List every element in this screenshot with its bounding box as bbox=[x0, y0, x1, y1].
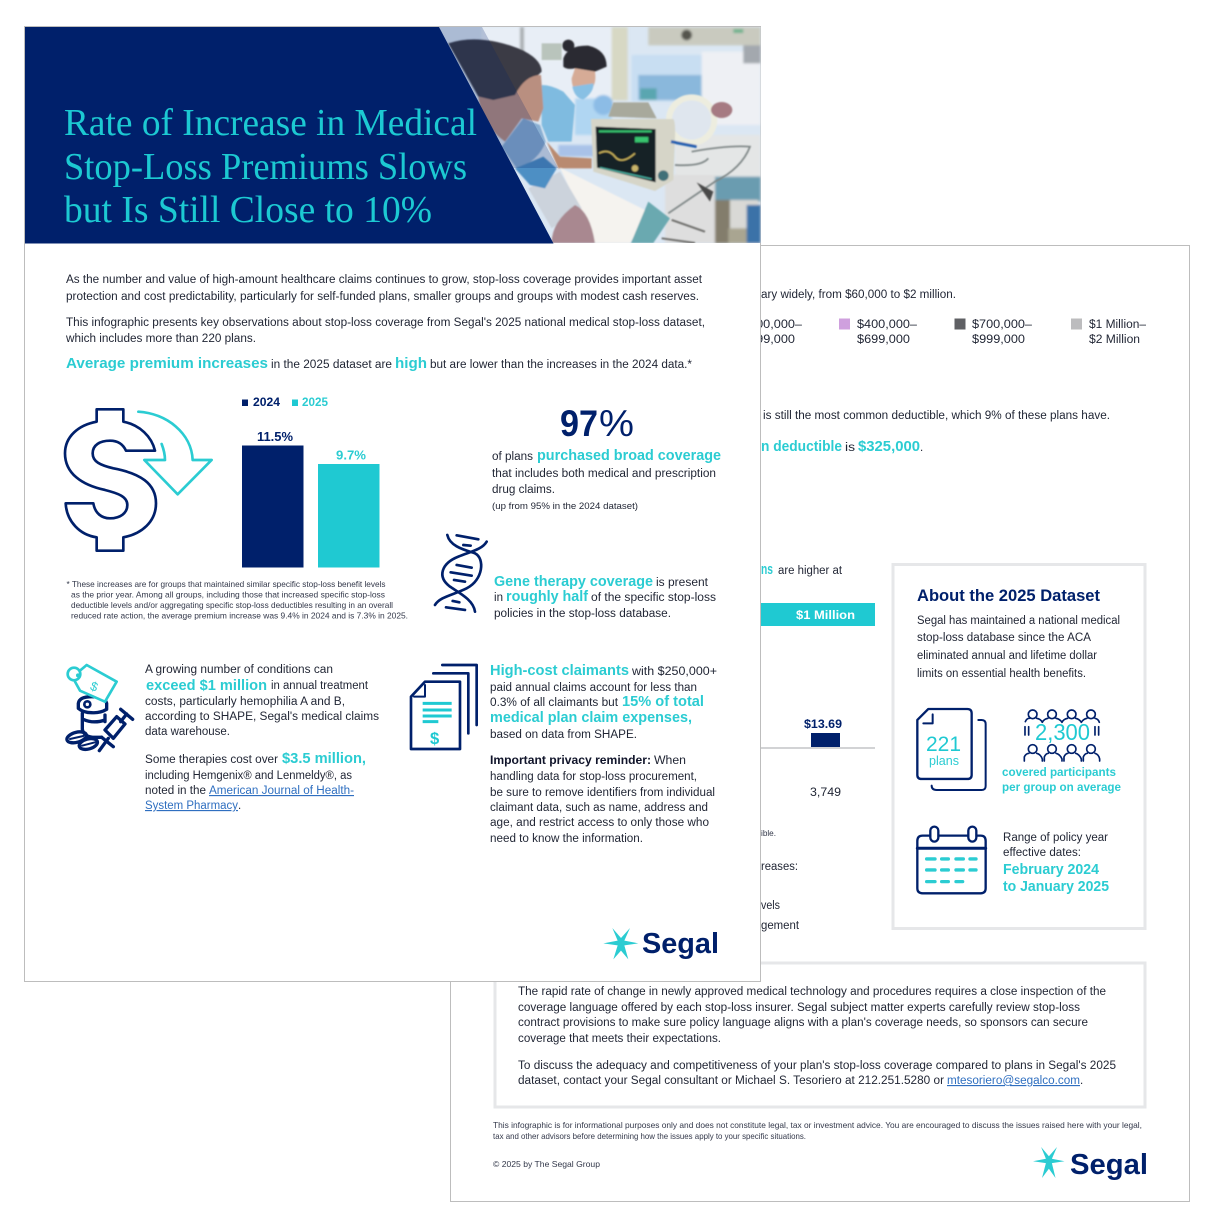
deductible legend: $100,000– bbox=[742, 319, 803, 331]
intro text: protection and cost predictability, particularly for self-funded plans, smaller groups and groups with modest cash reserves. bbox=[66, 291, 699, 303]
most common deductible text: is still the most common deductible, which 9% of these plans have. bbox=[763, 410, 1110, 422]
deductible legend: $399,000 bbox=[742, 334, 795, 346]
gene therapy text: Gene therapy coverage bbox=[494, 574, 653, 590]
gene therapy text bbox=[494, 574, 716, 620]
value: 3,749: 3,749 bbox=[810, 787, 841, 799]
panel: front page bbox=[24, 26, 761, 982]
translucent band bbox=[439, 27, 558, 168]
photo: nurses and patient monitor bbox=[435, 27, 761, 243]
exceed $1 million text: costs, particularly hemophilia A and B, bbox=[145, 696, 345, 708]
icon: participants: 2,300 bbox=[1035, 719, 1090, 745]
bar: $13.69 bbox=[761, 719, 875, 749]
stat: 97% bbox=[560, 403, 634, 444]
callout paragraph 2: mtesoriero@segalco.com bbox=[947, 1075, 1080, 1087]
high-cost claimants text: with $250,000+ bbox=[631, 666, 717, 678]
gene therapy text: policies in the stop-loss database. bbox=[494, 608, 671, 620]
gene therapy text: of the specific stop-loss bbox=[591, 592, 716, 604]
panel: About the 2025 Dataset bbox=[893, 564, 1145, 928]
average premium increases statement: Average premium increases bbox=[66, 356, 268, 372]
deductible range text: ary widely, from $60,000 to $2 million. bbox=[761, 289, 956, 301]
premiums text: are higher at bbox=[778, 565, 843, 577]
deductible legend: $999,000 bbox=[972, 334, 1025, 346]
cut-off text fragments: ible. bbox=[761, 828, 776, 838]
callout paragraph 2 bbox=[518, 1060, 1116, 1087]
effective dates text: February 2024 bbox=[1003, 862, 1099, 878]
bar: 2024 bbox=[242, 430, 304, 568]
high-cost claimants text bbox=[490, 663, 717, 741]
average premium increases statement: in the 2025 dataset are bbox=[271, 359, 392, 371]
$3.5 million text: . bbox=[238, 800, 241, 812]
disclaimer bbox=[493, 1120, 1142, 1141]
icon: 221 plans: plans bbox=[929, 753, 959, 768]
participants caption bbox=[1002, 765, 1121, 794]
description: Segal has maintained a national medical bbox=[917, 615, 1120, 627]
deductible legend: $400,000– bbox=[857, 319, 918, 331]
privacy reminder text: be sure to remove identifiers from individual bbox=[490, 787, 715, 799]
effective dates text: effective dates: bbox=[1003, 847, 1081, 859]
deductible legend: $700,000– bbox=[972, 319, 1033, 331]
privacy reminder text: claimant data, such as name, address and bbox=[490, 802, 708, 814]
high-cost claimants text: based on data from SHAPE. bbox=[490, 729, 637, 741]
broad coverage text: of plans bbox=[492, 451, 533, 463]
title: Stop-Loss Premiums Slows bbox=[64, 146, 467, 188]
panel: coverage language callout bbox=[495, 963, 1145, 1107]
title: Rate of Increase in Medical bbox=[64, 102, 477, 144]
privacy reminder text: Important privacy reminder: bbox=[490, 755, 651, 767]
legend: 2025 bbox=[302, 397, 329, 409]
broad coverage text bbox=[492, 448, 721, 512]
footnote: deductible levels and/or aggregating specific stop-loss deductibles resulting in an overall bbox=[71, 600, 393, 610]
cut-off text fragments: reases: bbox=[761, 861, 798, 873]
high-cost claimants text: paid annual claims account for less than bbox=[490, 682, 697, 694]
exceed $1 million text: according to SHAPE, Segal's medical claims bbox=[145, 711, 379, 723]
disclaimer: This infographic is for informational purposes only and does not constitute legal, tax or investment advice. You are encouraged to discuss the issues raised here with your legal, bbox=[493, 1120, 1142, 1130]
callout paragraph 1: coverage that meets their expectations. bbox=[518, 1033, 721, 1045]
deductible legend: $2 Million bbox=[1089, 334, 1140, 346]
median deductible text: . bbox=[920, 442, 923, 454]
gene therapy text: in bbox=[494, 592, 503, 604]
description bbox=[917, 615, 1120, 680]
icon: claim documents bbox=[411, 665, 477, 749]
$3.5 million text: American Journal of Health- bbox=[209, 785, 354, 797]
callout paragraph 1 bbox=[518, 986, 1106, 1045]
$3.5 million text: Some therapies cost over bbox=[145, 754, 278, 766]
logo: Segal (front page) bbox=[603, 928, 719, 960]
cut-off text fragments: gement bbox=[761, 920, 800, 932]
premiums text: ns bbox=[761, 562, 773, 578]
cut-off text fragments bbox=[761, 828, 800, 932]
gene therapy text: is present bbox=[656, 577, 709, 589]
callout paragraph 2: dataset, contact your Segal consultant or Michael S. Tesoriero at 212.251.5280 or bbox=[518, 1075, 944, 1087]
footnote: reduced rate action, the average premium increase was 9.4% in 2024 and is 7.3% in 2025. bbox=[71, 610, 408, 620]
average premium increases statement bbox=[66, 356, 693, 372]
deductible legend bbox=[742, 318, 1147, 346]
participants caption: per group on average bbox=[1002, 780, 1121, 794]
high-cost claimants text: High-cost claimants bbox=[490, 663, 629, 679]
title: but Is Still Close to 10% bbox=[64, 189, 432, 231]
average premium increases statement: high bbox=[395, 356, 427, 372]
effective dates text bbox=[1003, 832, 1109, 895]
description: stop-loss database since the ACA bbox=[917, 632, 1091, 644]
deductible legend: $1 Million– bbox=[1089, 319, 1147, 331]
effective dates text: to January 2025 bbox=[1003, 879, 1109, 895]
intro text: which includes more than 220 plans. bbox=[65, 333, 256, 345]
banner bbox=[25, 27, 761, 243]
icon: 221 plans bbox=[917, 709, 986, 790]
stat: 97%: % bbox=[599, 403, 634, 444]
logo: Segal (back page) bbox=[1033, 1147, 1148, 1181]
icon: 221 plans: 221 bbox=[926, 733, 961, 756]
$3.5 million text: including Hemgenix® and Lenmeldy®, as bbox=[145, 770, 352, 782]
privacy reminder text: need to know the information. bbox=[490, 833, 643, 845]
privacy reminder text bbox=[490, 755, 715, 845]
icon: DNA bbox=[435, 535, 487, 612]
bar chart: average premium increases bbox=[242, 397, 380, 568]
exceed $1 million text: data warehouse. bbox=[145, 726, 230, 738]
copyright: © 2025 by The Segal Group bbox=[493, 1159, 600, 1169]
title bbox=[64, 102, 477, 231]
table header: $1 Million: $1 Million bbox=[796, 608, 855, 622]
median deductible text: $325,000 bbox=[858, 439, 920, 455]
description: limits on essential health benefits. bbox=[917, 668, 1086, 680]
icon: dollar with down arrow bbox=[65, 409, 212, 551]
icon: price tag, medicine and syringe: $ bbox=[88, 679, 100, 695]
broad coverage text: (up from 95% in the 2024 dataset) bbox=[492, 501, 638, 512]
legend: 2024 bbox=[253, 397, 281, 409]
footnote: as the prior year. Among all groups, including those that increased specific stop-loss bbox=[71, 590, 385, 600]
logo: Segal (back page): Segal bbox=[1070, 1149, 1148, 1181]
deductible legend: $699,000 bbox=[857, 334, 910, 346]
bar: 2024: 11.5% bbox=[257, 430, 293, 444]
heading: About the 2025 Dataset bbox=[917, 586, 1100, 605]
$3.5 million text: noted in the bbox=[145, 785, 206, 797]
bar: $13.69: $13.69 bbox=[804, 719, 842, 731]
logo: Segal (front page): Segal bbox=[642, 928, 719, 960]
exceed $1 million text: in annual treatment bbox=[271, 680, 369, 692]
privacy reminder text: When bbox=[654, 755, 686, 767]
callout paragraph 1: The rapid rate of change in newly approved medical technology and procedures requires a close inspection of the bbox=[518, 986, 1106, 998]
legend bbox=[242, 397, 329, 409]
callout paragraph 1: coverage language offered by each stop-loss insurer. Segal subject matter experts carefully review stop-loss bbox=[518, 1002, 1080, 1014]
gene therapy text: roughly half bbox=[506, 589, 588, 605]
footnote: * These increases are for groups that maintained similar specific stop-loss benefit levels bbox=[66, 579, 386, 589]
footnote bbox=[66, 579, 408, 620]
icon: price tag, medicine and syringe bbox=[66, 665, 133, 751]
intro text: As the number and value of high-amount healthcare claims continues to grow, stop-loss coverage provides important asset bbox=[66, 274, 703, 286]
broad coverage text: drug claims. bbox=[492, 484, 555, 496]
intro text: This infographic presents key observations about stop-loss coverage from Segal's 2025 national medical stop-loss dataset, bbox=[66, 317, 705, 329]
bar: 2025: 9.7% bbox=[336, 448, 366, 462]
$3.5 million text: System Pharmacy bbox=[145, 800, 238, 812]
callout paragraph 1: contract provisions to make sure policy language aligns with a plan's coverage needs, so sponsors can secure bbox=[518, 1017, 1088, 1029]
exceed $1 million text: A growing number of conditions can bbox=[145, 664, 333, 676]
disclaimer: tax and other advisors before determining how the issues apply to your specific situations. bbox=[493, 1131, 806, 1141]
broad coverage text: purchased broad coverage bbox=[537, 448, 721, 464]
median deductible text: n deductible bbox=[761, 439, 842, 455]
callout paragraph 2: To discuss the adequacy and competitiveness of your plan's stop-loss coverage compared to plans in Segal's 2025 bbox=[518, 1060, 1116, 1072]
average premium increases statement: but are lower than the increases in the 2024 data.* bbox=[430, 359, 693, 371]
icon: calendar bbox=[917, 827, 986, 893]
broad coverage text: that includes both medical and prescription bbox=[492, 468, 716, 480]
participants caption: covered participants bbox=[1002, 765, 1116, 779]
high-cost claimants text: 15% of total bbox=[622, 694, 704, 710]
stat: 97%: 97 bbox=[560, 403, 598, 444]
premiums text bbox=[761, 562, 843, 578]
effective dates text: Range of policy year bbox=[1003, 832, 1108, 844]
high-cost claimants text: medical plan claim expenses, bbox=[490, 710, 692, 726]
table header: $1 Million bbox=[761, 603, 875, 626]
privacy reminder text: age, and restrict access to only those who bbox=[490, 817, 709, 829]
median deductible text bbox=[761, 439, 923, 455]
panel: back page bbox=[450, 246, 1190, 1202]
description: eliminated annual and lifetime dollar bbox=[917, 650, 1097, 662]
exceed $1 million text: exceed $1 million bbox=[146, 678, 267, 694]
high-cost claimants text: 0.3% of all claimants but bbox=[490, 697, 619, 709]
callout paragraph 2: . bbox=[1080, 1075, 1083, 1087]
bar: 2025 bbox=[318, 448, 380, 568]
$3.5 million text bbox=[145, 751, 366, 812]
cut-off text fragments: vels bbox=[761, 900, 780, 912]
intro text bbox=[65, 274, 705, 345]
exceed $1 million text bbox=[145, 664, 379, 738]
banner navy panel bbox=[25, 27, 554, 244]
privacy reminder text: handling data for stop-loss procurement, bbox=[490, 771, 697, 783]
$3.5 million text: $3.5 million, bbox=[282, 751, 366, 767]
icon: claim documents: $ bbox=[430, 729, 440, 748]
icon: participants bbox=[1024, 710, 1100, 761]
median deductible text: is bbox=[845, 442, 855, 454]
